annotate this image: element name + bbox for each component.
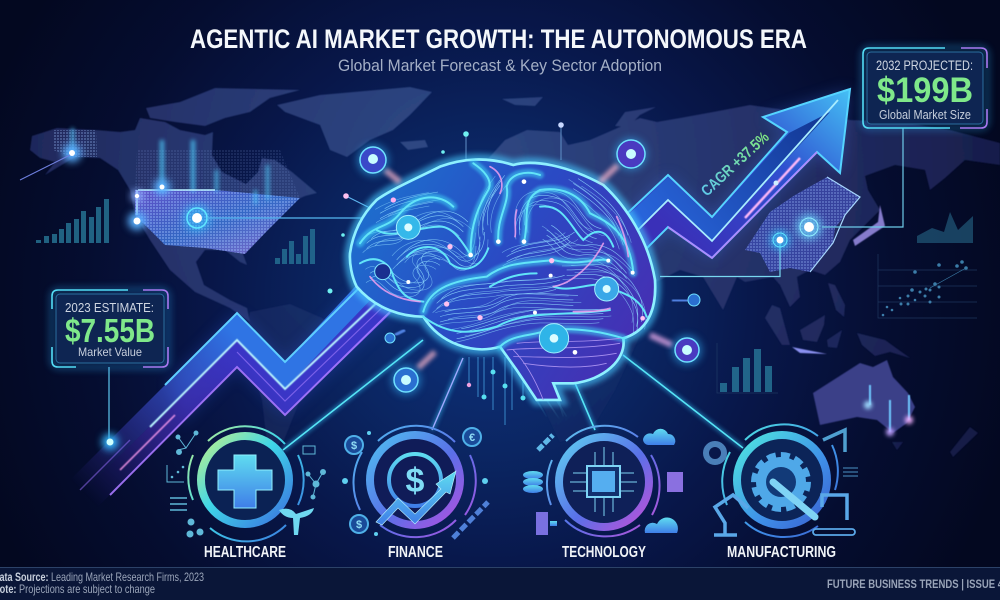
growth arrow: right segment	[618, 89, 850, 270]
top nodes	[466, 125, 561, 160]
right arrow streak	[745, 158, 800, 218]
philippines	[828, 283, 845, 317]
sector: healthcare	[167, 426, 326, 561]
tasmania	[892, 442, 903, 450]
left arrow streak	[150, 295, 385, 427]
usa lit region	[20, 128, 362, 254]
left callout leader node	[102, 434, 118, 450]
data source note: Data Source: Leading Market Research Firms, 2023	[0, 570, 204, 584]
brain fine contours	[362, 175, 646, 343]
right callout caption: Global Market Size	[879, 108, 971, 122]
right callout box	[867, 52, 983, 124]
sector: manufacturing	[706, 424, 858, 561]
connector lines to sectors	[283, 340, 743, 450]
left callout value: $7.55B	[65, 312, 155, 349]
japan	[853, 205, 885, 246]
manufacturing connector	[623, 355, 743, 448]
brain nodes	[391, 179, 645, 355]
coin glyphs: $	[356, 519, 362, 531]
alaska dots	[53, 130, 97, 157]
orb: small left comet	[385, 330, 405, 343]
data lines under brain	[469, 357, 523, 425]
title: AGENTIC AI MARKET GROWTH: THE AUTONOMOUS ERA	[190, 24, 807, 54]
orb: top left	[357, 144, 400, 182]
growth arrow: left segment	[45, 268, 405, 530]
manufacturing label: MANUFACTURING	[727, 544, 836, 561]
scatter chart: asia	[878, 254, 977, 318]
wrench	[773, 482, 815, 517]
finance connector	[432, 358, 463, 430]
right callout glow	[863, 48, 987, 128]
technology label: TECHNOLOGY	[562, 544, 646, 561]
gear	[754, 455, 808, 509]
technology ring	[547, 426, 660, 536]
new zealand	[950, 427, 978, 457]
brain stem streaks	[500, 340, 567, 420]
healthcare cross	[218, 455, 272, 508]
left arrow glow	[170, 268, 405, 425]
arctic islands	[146, 88, 300, 126]
healthcare ring	[188, 426, 304, 541]
usa dots	[135, 190, 300, 254]
orb: bottom left	[391, 352, 435, 395]
robot arm: top	[823, 430, 845, 452]
china dots	[745, 177, 860, 272]
mini area chart: asia	[917, 212, 973, 243]
finance ring	[353, 426, 476, 537]
small map nodes	[328, 122, 564, 294]
footer band	[0, 567, 1000, 600]
robot arm: right	[813, 495, 855, 535]
south asia leader	[660, 240, 780, 276]
greenland	[277, 87, 432, 157]
finance label: FINANCE	[388, 544, 443, 561]
finance chain	[453, 502, 488, 538]
coin glyphs: €	[469, 432, 475, 444]
orb: top right	[600, 138, 647, 182]
australia lights	[864, 385, 913, 436]
usa hub	[183, 204, 362, 232]
healthcare side icons	[167, 431, 326, 537]
brain orbs	[375, 215, 619, 353]
left arrow outlines	[165, 277, 370, 385]
connector glow	[283, 340, 743, 450]
finance growth arrow	[376, 471, 456, 525]
brain glow	[350, 160, 655, 400]
dollar sign: $	[406, 462, 425, 500]
orb: bottom right	[650, 335, 702, 365]
healthcare label: HEALTHCARE	[204, 544, 286, 561]
right arrow inner chevrons	[628, 100, 838, 241]
technology connector	[575, 383, 595, 430]
sector: technology	[523, 426, 683, 561]
world map	[30, 87, 1000, 457]
left callout box	[56, 294, 164, 363]
brain folds: pink	[370, 167, 628, 312]
novaya zemlya	[615, 107, 656, 127]
right arrow lower line	[668, 152, 817, 258]
new guinea	[857, 333, 910, 358]
mini bar chart: indian ocean	[717, 343, 778, 393]
left arrow lower band	[60, 290, 405, 530]
coin glyphs	[351, 432, 475, 531]
right callout leader	[822, 128, 903, 227]
left arrow upper band	[45, 276, 380, 515]
left arrow inner lines	[237, 300, 390, 401]
finance coins	[345, 428, 481, 533]
java	[792, 347, 827, 354]
brain folds: cyan	[360, 163, 647, 347]
floating orbs around brain	[357, 138, 702, 395]
usa border line	[137, 190, 215, 215]
mini bar chart: left	[36, 199, 109, 243]
pink node	[346, 196, 370, 208]
right callout value: $199B	[877, 71, 973, 110]
caduceus	[279, 508, 314, 535]
finance dots	[342, 431, 488, 536]
europe and asia	[430, 105, 1000, 310]
healthcare connector	[283, 340, 423, 450]
sulawesi	[827, 330, 842, 348]
tech link icon	[538, 435, 553, 450]
left callout glow	[52, 290, 168, 367]
north america	[30, 118, 317, 322]
right callout corners	[863, 48, 950, 128]
sector: finance	[342, 426, 488, 561]
china coast glow	[810, 177, 860, 272]
brain	[350, 160, 655, 420]
malay and sumatra	[765, 305, 790, 345]
canada dots	[135, 150, 300, 198]
borneo	[800, 315, 825, 342]
svalbard	[502, 97, 543, 106]
callout: 2023 estimate	[52, 290, 168, 450]
usa glow nodes	[20, 144, 170, 230]
callout: 2032 projected	[822, 48, 987, 227]
mini bar chart: americas	[275, 229, 315, 264]
south america	[245, 304, 346, 452]
data line nodes	[467, 370, 526, 400]
left callout leader	[108, 367, 110, 440]
left callout label: 2023 ESTIMATE:	[65, 300, 154, 315]
iceland	[400, 140, 428, 150]
orb: small right comet	[672, 294, 700, 306]
right arrow upper band	[628, 112, 830, 241]
subtitle: Global Market Forecast & Key Sector Adoption	[338, 56, 662, 75]
china hubs	[770, 214, 822, 250]
brain folds: glow	[360, 163, 633, 347]
left callout corners	[52, 290, 128, 367]
cerebellum lines	[507, 338, 620, 400]
left callout caption: Market Value	[78, 345, 142, 359]
microchip	[570, 447, 637, 516]
footer	[0, 567, 1000, 600]
robot arm: left	[714, 495, 748, 535]
control panel	[843, 468, 858, 476]
africa	[425, 258, 645, 442]
brain body	[350, 160, 655, 400]
right arrow body	[618, 89, 850, 270]
usa light spires	[71, 128, 269, 204]
tech side icons	[523, 429, 683, 535]
right arrow glow	[618, 89, 850, 270]
coin glyphs: $	[351, 440, 357, 452]
cagr label: CAGR +37.5%	[698, 129, 773, 200]
australia	[813, 360, 915, 433]
small gear	[706, 444, 724, 462]
china lit region	[660, 177, 885, 276]
manufacturing ring	[722, 424, 838, 537]
right callout label: 2032 PROJECTED:	[876, 58, 973, 73]
